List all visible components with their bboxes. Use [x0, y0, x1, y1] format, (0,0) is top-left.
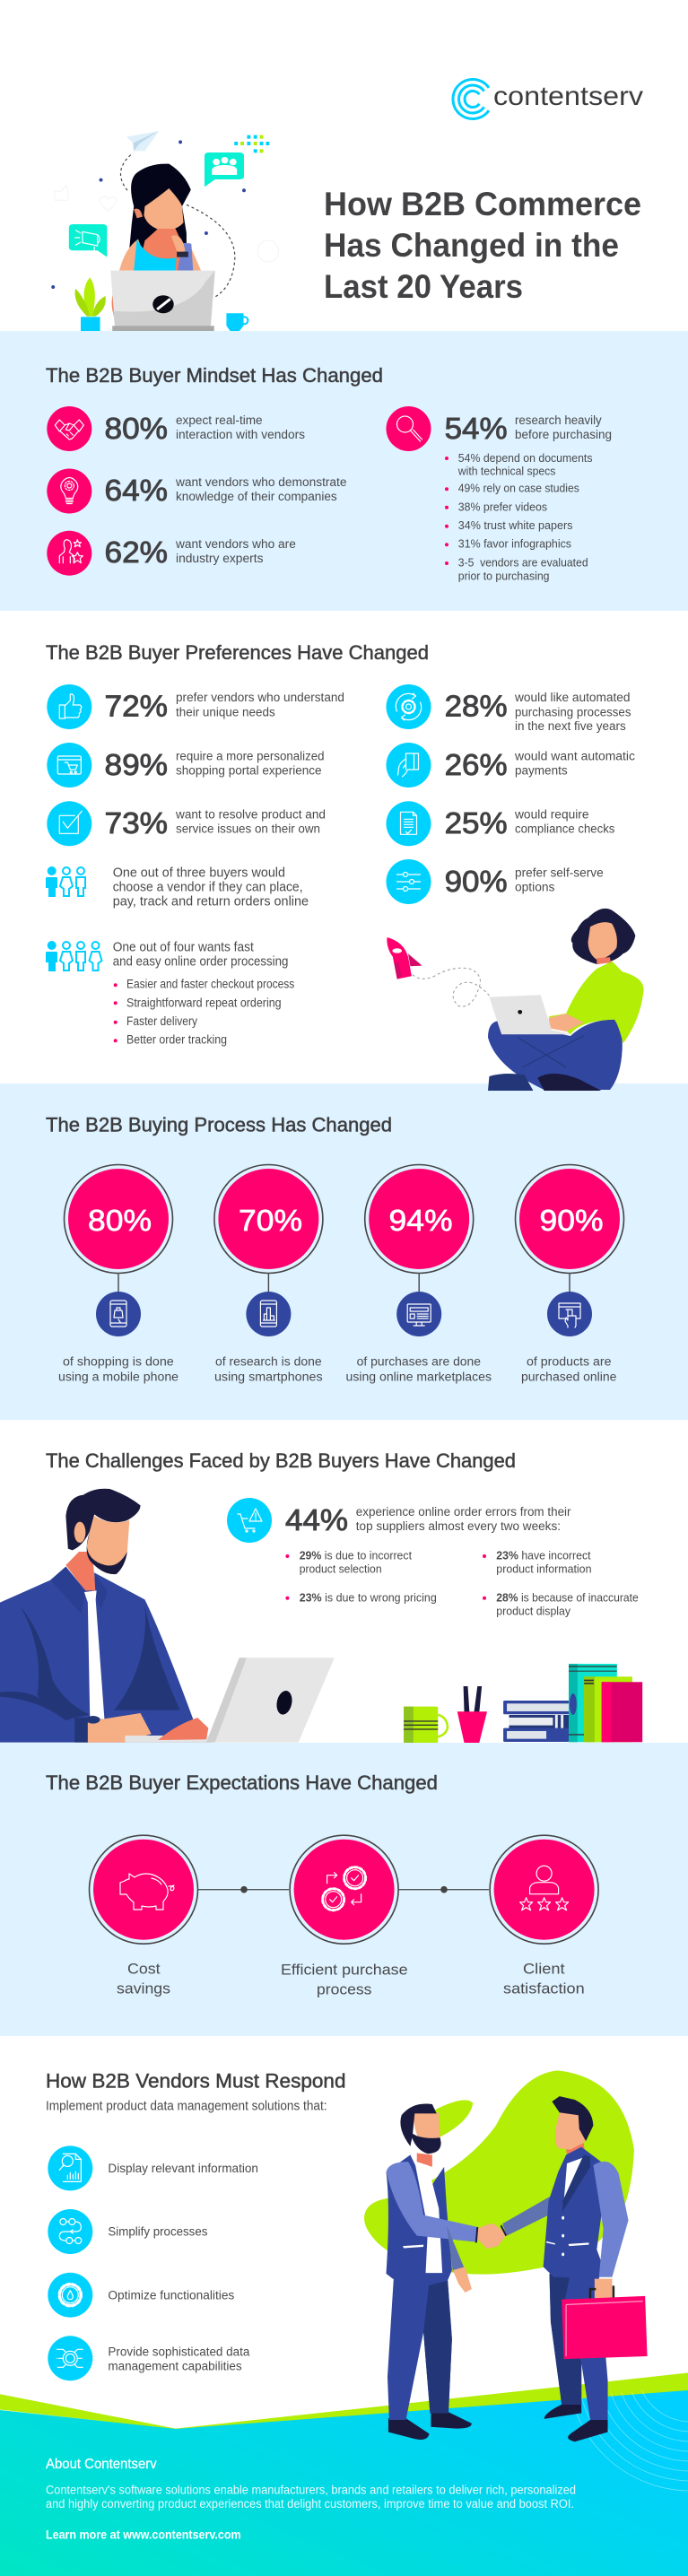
icon: gears with arrows — [323, 1867, 366, 1910]
icon: data network — [57, 2349, 83, 2367]
footer background — [0, 2373, 688, 2576]
footer: about contentserv: Learn more at www.contentserv.com — [46, 2528, 241, 2542]
stat: 64%: 64% — [104, 474, 168, 507]
error causes list: product display — [496, 1605, 571, 1617]
item: sophisticated data management — [48, 2336, 250, 2380]
heading: How B2B Vendors Must Respond — [46, 2070, 346, 2093]
panel: buying process — [0, 1083, 688, 1420]
stat: 44% — [227, 1498, 571, 1543]
stat: 72%: prefer vendors who understand — [176, 691, 344, 704]
callout: one out of four buyers: One out of four wants fast — [113, 941, 254, 955]
footer: about contentserv: About Contentserv — [46, 2457, 157, 2472]
stat circle: 94% marketplaces: of purchases are done — [357, 1355, 481, 1369]
stat circle: 90% purchased online: 90% — [540, 1204, 603, 1237]
title: Last 20 Years — [324, 268, 523, 305]
footer: about contentserv — [46, 2457, 576, 2542]
logo: contentserv: contentserv — [493, 82, 643, 111]
title: Has Changed in the — [324, 227, 619, 264]
header panel — [0, 0, 688, 331]
stat circle: 90% purchased online: of products are — [527, 1355, 612, 1369]
heading: The B2B Buyer Preferences Have Changed — [46, 641, 429, 664]
order processing list: Better order tracking — [126, 1033, 227, 1047]
stat: 62%: 62% — [104, 535, 168, 569]
stat: 64%: want vendors who demonstrate — [175, 475, 346, 489]
item: optimize functionalities: Optimize functionalities — [108, 2288, 235, 2302]
icon: light bulb — [61, 477, 78, 504]
research list: with technical specs — [457, 466, 555, 478]
stat: 90%: prefer self-serve — [515, 866, 604, 879]
right man — [502, 2096, 648, 2441]
callout: one out of three buyers — [46, 866, 309, 909]
stat: 44%: experience online order errors from their — [356, 1505, 571, 1519]
stat: 90% — [386, 859, 604, 904]
illustration: woman with laptop — [488, 909, 644, 1091]
item: cost savings: Cost — [127, 1961, 161, 1978]
logo: contentserv — [453, 79, 643, 118]
panel: buyer expectations — [0, 1743, 688, 2036]
item: optimize functionalities — [48, 2273, 235, 2318]
item: efficient purchase process: process — [317, 1980, 371, 1997]
stat circle: 94% marketplaces: using online marketplaces — [346, 1370, 492, 1383]
stat: 80%: interaction with vendors — [176, 428, 305, 441]
callout: one out of four buyers — [46, 941, 295, 1047]
item: client satisfaction — [490, 1835, 598, 1997]
research list: 54% depend on documents — [458, 452, 592, 465]
error causes list: 29% is due to incorrect — [300, 1549, 413, 1562]
icon: hand with card — [398, 753, 418, 777]
left man — [386, 2104, 478, 2440]
icon: hand clicking browser — [559, 1303, 580, 1327]
item: efficient purchase process — [281, 1835, 407, 1997]
icon: gear cycle — [396, 693, 422, 720]
stat: 72%: their unique needs — [176, 705, 275, 718]
item: simplify processes — [48, 2209, 208, 2254]
stat: 25%: compliance checks — [515, 822, 615, 836]
order processing list: Easier and faster checkout process — [126, 978, 295, 991]
icon: report with magnifier — [59, 2154, 81, 2181]
stat: 25%: would require — [514, 807, 588, 821]
icon: phone with chart — [260, 1301, 276, 1327]
stat: 54% with research list: research heavily — [515, 413, 602, 427]
icon: online marketplace monitor — [407, 1304, 431, 1326]
title: How B2B Commerce — [324, 186, 641, 222]
stat: 73%: want to resolve product and — [175, 807, 326, 821]
pink briefcase — [562, 2296, 648, 2359]
heading: The Challenges Faced by B2B Buyers Have Changed — [46, 1449, 516, 1472]
icon: thumbs up — [59, 694, 82, 718]
illustration: rocket — [387, 937, 489, 1006]
stat circle: 80% mobile phone: 80% — [88, 1204, 152, 1237]
icon: process flow — [59, 2219, 82, 2244]
stat circle: 94% marketplaces — [346, 1164, 492, 1383]
icon: person with three stars — [520, 1866, 569, 1910]
error causes list — [285, 1549, 639, 1617]
stat: 54% with research list — [386, 406, 612, 582]
stat: 26% — [386, 743, 635, 788]
stat circle: 94% marketplaces: 94% — [389, 1204, 452, 1237]
subheading: Implement product data management solutions that: — [46, 2099, 327, 2113]
stat: 62%: want vendors who are — [175, 537, 296, 551]
footer: about contentserv: Contentserv's software solutions enable manufacturers, brands and retailers to deliver rich, personalized — [46, 2484, 576, 2497]
error causes list: 23% have incorrect — [496, 1549, 591, 1562]
icon: expert with stars — [59, 540, 83, 563]
stat circle: 70% smartphones — [214, 1164, 323, 1383]
stat: 80%: 80% — [104, 412, 168, 445]
research list: 38% prefer videos — [458, 500, 547, 513]
stat: 89%: require a more personalized — [176, 749, 325, 762]
illustration: man at laptop — [0, 1489, 335, 1743]
stat: 28%: in the next five years — [515, 719, 626, 733]
order processing list: Faster delivery — [126, 1014, 197, 1028]
stat: 54% with research list: before purchasing — [515, 428, 612, 441]
stat: 89% — [47, 743, 325, 788]
stat circle: 70% smartphones: of research is done — [215, 1355, 322, 1369]
item: cost savings — [90, 1835, 197, 1997]
item: display relevant information: Display relevant information — [108, 2162, 258, 2175]
panel: buyer mindset — [0, 331, 688, 611]
stat circle: 70% smartphones: using smartphones — [214, 1370, 323, 1383]
item: efficient purchase process: Efficient purchase — [281, 1962, 407, 1979]
stat circle: 70% smartphones: 70% — [239, 1204, 302, 1237]
icon: magnifying glass — [396, 416, 422, 441]
item: client satisfaction: Client — [523, 1961, 565, 1978]
heading: The B2B Buyer Mindset Has Changed — [46, 364, 383, 387]
research list: 34% trust white papers — [458, 519, 572, 532]
stat: 73%: 73% — [104, 806, 168, 840]
icon: piggy bank — [120, 1874, 174, 1910]
order processing list — [114, 978, 295, 1047]
stat: 25%: 25% — [445, 806, 508, 840]
stat: 90%: options — [515, 881, 555, 894]
illustration: two businessmen shaking hands — [364, 2070, 648, 2441]
item: cost savings: savings — [117, 1980, 170, 1997]
callout: one out of three buyers: pay, track and return orders online — [113, 894, 309, 909]
error causes list: product information — [496, 1562, 592, 1575]
panel: buyer preferences — [46, 641, 635, 1047]
stat: 26%: 26% — [445, 748, 508, 781]
stat: 64%: knowledge of their companies — [176, 490, 337, 503]
research list: prior to purchasing — [458, 570, 550, 582]
stat circle: 80% mobile phone — [58, 1164, 179, 1383]
stat: 28%: 28% — [445, 690, 508, 723]
error causes list: 23% is due to wrong pricing — [300, 1591, 437, 1604]
icon: gear with drop — [59, 2284, 81, 2306]
item: client satisfaction: satisfaction — [503, 1980, 585, 1997]
callout: one out of four buyers: and easy online order processing — [113, 955, 288, 970]
stat: 26%: payments — [515, 763, 568, 777]
footer: about contentserv: and highly converting product experiences that delight customers, improve time to value and boost ROI. — [46, 2497, 574, 2511]
stat: 44%: 44% — [285, 1503, 348, 1536]
illustration: woman at laptop — [51, 131, 279, 331]
stat circle: 80% mobile phone: of shopping is done — [63, 1355, 174, 1369]
stat: 25% — [386, 801, 615, 846]
item: simplify processes: Simplify processes — [108, 2225, 208, 2239]
stat circle: 90% purchased online — [515, 1164, 624, 1383]
stat: 89%: 89% — [104, 748, 168, 781]
icon: shopping browser — [57, 756, 81, 774]
heading: The B2B Buyer Expectations Have Changed — [46, 1771, 438, 1794]
stat: 90%: 90% — [445, 865, 508, 898]
stat: 64% — [47, 468, 347, 513]
stat: 80% — [47, 406, 305, 451]
stat: 89%: shopping portal experience — [176, 763, 322, 777]
item: display relevant information — [48, 2145, 258, 2190]
error causes list: product selection — [300, 1562, 382, 1575]
item: sophisticated data management: Provide sophisticated data — [108, 2345, 250, 2358]
icon: handshake — [55, 420, 83, 439]
icon: phone with bag — [110, 1301, 126, 1327]
heading: The B2B Buying Process Has Changed — [46, 1114, 392, 1136]
callout: one out of three buyers: choose a vendor if they can place, — [113, 880, 303, 894]
stat: 28% — [386, 684, 631, 733]
title — [324, 186, 641, 305]
icon: four people — [46, 941, 102, 971]
stat: 28%: purchasing processes — [515, 705, 631, 718]
research list: 3-5 vendors are evaluated — [458, 557, 588, 570]
order processing list: Straightforward repeat ordering — [126, 996, 282, 1009]
research list: 31% favor infographics — [458, 538, 571, 551]
stat: 28%: would like automated — [514, 691, 630, 704]
research list — [445, 452, 592, 582]
panel: how vendors must respond — [46, 2070, 346, 2380]
stat: 62%: industry experts — [176, 552, 264, 565]
stat circle: 80% mobile phone: using a mobile phone — [58, 1370, 179, 1383]
connectors — [198, 1886, 489, 1893]
icon: three people — [46, 866, 85, 897]
panel: challenges — [0, 1449, 642, 1743]
stat: 80%: expect real-time — [176, 413, 263, 427]
stat: 54% with research list: 54% — [445, 412, 508, 445]
stat circle: 90% purchased online: purchased online — [521, 1370, 616, 1383]
illustration: desk items — [404, 1664, 642, 1743]
stat: 72% — [47, 684, 344, 729]
research list: 49% rely on case studies — [458, 483, 579, 495]
icon: checklist document — [400, 812, 416, 834]
icon: check box — [59, 811, 82, 833]
icon: sliders — [396, 872, 420, 892]
stat: 72%: 72% — [104, 690, 168, 723]
icon: cart with warning — [238, 1509, 262, 1532]
stat: 73% — [47, 801, 326, 846]
stat: 62% — [47, 531, 296, 576]
stat: 44%: top suppliers almost every two weeks: — [356, 1519, 561, 1533]
error causes list: 28% is because of inaccurate — [496, 1591, 639, 1604]
item: sophisticated data management: management capabilities — [108, 2359, 242, 2372]
stat: 26%: would want automatic — [514, 749, 635, 762]
stat: 73%: service issues on their own — [176, 822, 320, 836]
callout: one out of three buyers: One out of three buyers would — [113, 866, 285, 880]
